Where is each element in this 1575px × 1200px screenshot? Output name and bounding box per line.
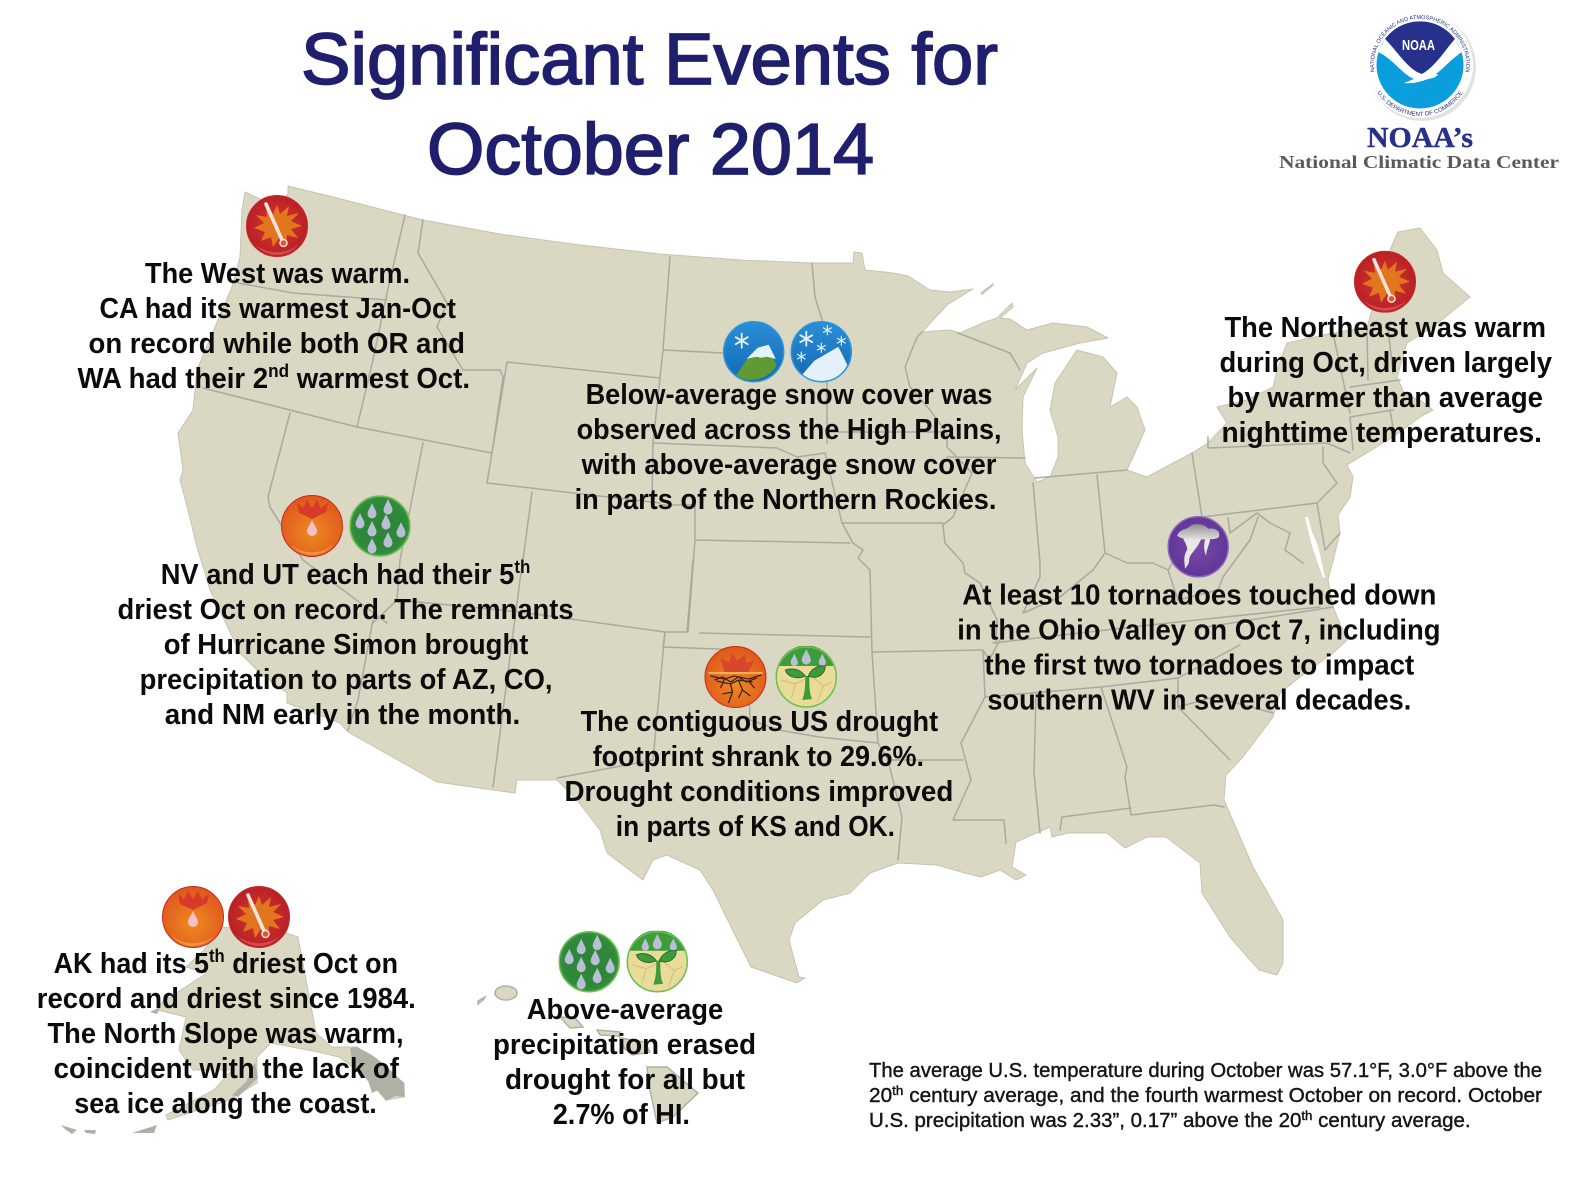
text: NV and UT: and NM early in the month. bbox=[165, 699, 520, 731]
icon: Hawaii rain bbox=[559, 932, 619, 992]
text: NV and UT: precipitation to parts of AZ, CO, bbox=[140, 664, 552, 696]
text: Northeast warm: by warmer than average bbox=[1228, 382, 1543, 414]
text: Alaska: th bbox=[209, 946, 225, 966]
logo: NOAA seal and wordmark: NATIONAL OCEANIC AND ATMOSPHERIC ADMINISTRATION bbox=[1370, 15, 1470, 72]
text: tornadoes: the first two tornadoes to impact bbox=[984, 650, 1415, 682]
text: drought footprint bbox=[564, 706, 953, 843]
text: tornadoes: At least 10 tornadoes touched down bbox=[962, 580, 1436, 612]
icon: dry sun and drop bbox=[282, 496, 342, 556]
text: West was warm: warmest Oct. bbox=[289, 363, 470, 395]
text: tornadoes: southern WV in several decades. bbox=[987, 684, 1411, 716]
icon: Alaska warm bbox=[228, 886, 290, 948]
text: West was warm bbox=[78, 258, 470, 395]
icon: snow cover mountain bbox=[723, 321, 784, 382]
map: contiguous United States bbox=[178, 186, 1470, 983]
text: Hawaii: drought for all but bbox=[505, 1064, 745, 1096]
text: drought footprint: footprint shrank to 29.6%. bbox=[593, 741, 924, 773]
text: national summary note: The average U.S. temperature during October was 57.1°F, 3.0°F above the bbox=[869, 1060, 1542, 1082]
text: national summary note: U.S. precipitation was 2.33”, 0.17” above the 20 bbox=[869, 1110, 1291, 1132]
text: drought footprint: in parts of KS and OK. bbox=[616, 811, 895, 843]
text: Alaska: The North Slope was warm, bbox=[48, 1018, 404, 1050]
text: snow cover bbox=[575, 379, 1002, 516]
icon: plant recovering bbox=[776, 645, 837, 708]
icon: rain drops bbox=[350, 496, 410, 556]
text: snow cover: with above-average snow cover bbox=[581, 449, 996, 481]
text: national summary note: century average, and the fourth warmest October on record. October bbox=[903, 1085, 1542, 1107]
text: snow cover: observed across the High Plains, bbox=[577, 414, 1002, 446]
text: NV and UT: of Hurricane Simon brought bbox=[164, 629, 529, 661]
text: tornadoes: in the Ohio Valley on Oct 7, including bbox=[957, 614, 1440, 646]
text: Hawaii bbox=[493, 994, 756, 1131]
text: national summary note: th bbox=[892, 1083, 903, 1098]
text: Alaska: record and driest since 1984. bbox=[37, 983, 416, 1015]
icon: Hawaii plant bbox=[627, 930, 688, 992]
logo: NOAA seal and wordmark: NOAA bbox=[1402, 37, 1435, 54]
text: drought footprint: Drought conditions improved bbox=[564, 776, 953, 808]
icon: Alaska dry bbox=[162, 886, 224, 948]
text: Alaska: AK had its 5 bbox=[54, 948, 221, 980]
text: Northeast warm: The Northeast was warm bbox=[1224, 312, 1546, 344]
icon: tornado bbox=[1168, 517, 1228, 577]
text: Alaska: coincident with the lack of bbox=[54, 1053, 399, 1085]
icon: West warm thermometer bbox=[246, 196, 308, 256]
logo: NOAA seal and wordmark: NOAA’s bbox=[1367, 122, 1473, 154]
text: West was warm: nd bbox=[268, 361, 289, 381]
icon: Northeast warm thermometer bbox=[1354, 251, 1416, 312]
logo: NOAA seal and wordmark: National Climatic Data Center bbox=[1279, 152, 1559, 172]
text: national summary note: 20 bbox=[869, 1085, 891, 1107]
map: Hawaii bbox=[478, 986, 698, 1123]
text: tornadoes bbox=[957, 580, 1440, 716]
text: drought footprint: The contiguous US drought bbox=[581, 706, 939, 738]
state boundaries bbox=[203, 215, 1400, 860]
text: NV and UT: driest Oct on record. The remnants bbox=[118, 594, 574, 626]
text: Northeast warm: during Oct, driven largely bbox=[1220, 347, 1552, 379]
icon: cracked drought ground bbox=[705, 646, 766, 708]
text: national summary note bbox=[869, 1060, 1542, 1132]
text: national summary note: th bbox=[1301, 1108, 1312, 1123]
text: snow cover: Below-average snow cover was bbox=[586, 379, 992, 411]
text: Northeast warm: nighttime temperatures. bbox=[1222, 417, 1542, 449]
text: Alaska bbox=[37, 946, 416, 1120]
text: Hawaii: Above-average bbox=[527, 994, 723, 1026]
title: October 2014 bbox=[427, 110, 874, 190]
text: Alaska: driest Oct on bbox=[225, 948, 398, 980]
text: national summary note: century average. bbox=[1312, 1110, 1471, 1132]
icon: snow cover flakes bbox=[791, 321, 852, 382]
logo: NOAA seal and wordmark: U.S. DEPARTMENT OF COMMERCE bbox=[1378, 90, 1463, 116]
map: Alaska bbox=[61, 927, 405, 1134]
text: NV and UT bbox=[118, 557, 574, 731]
text: West was warm: The West was warm. bbox=[145, 258, 410, 290]
text: Hawaii: precipitation erased bbox=[493, 1029, 756, 1061]
text: West was warm: CA had its warmest Jan-Oct bbox=[100, 293, 456, 325]
text: Hawaii: 2.7% of HI. bbox=[553, 1099, 690, 1131]
text: Northeast warm bbox=[1220, 312, 1552, 449]
text: NV and UT: th bbox=[514, 557, 530, 577]
title: Significant Events for bbox=[301, 20, 998, 100]
title bbox=[301, 20, 998, 190]
text: snow cover: in parts of the Northern Rockies. bbox=[575, 484, 996, 516]
logo: NOAA seal and wordmark bbox=[1279, 15, 1559, 172]
text: NV and UT: NV and UT each had their 5 bbox=[161, 559, 536, 591]
text: Alaska: sea ice along the coast. bbox=[74, 1088, 377, 1120]
text: West was warm: on record while both OR and bbox=[88, 328, 465, 360]
text: West was warm: WA had their 2 bbox=[78, 363, 278, 395]
